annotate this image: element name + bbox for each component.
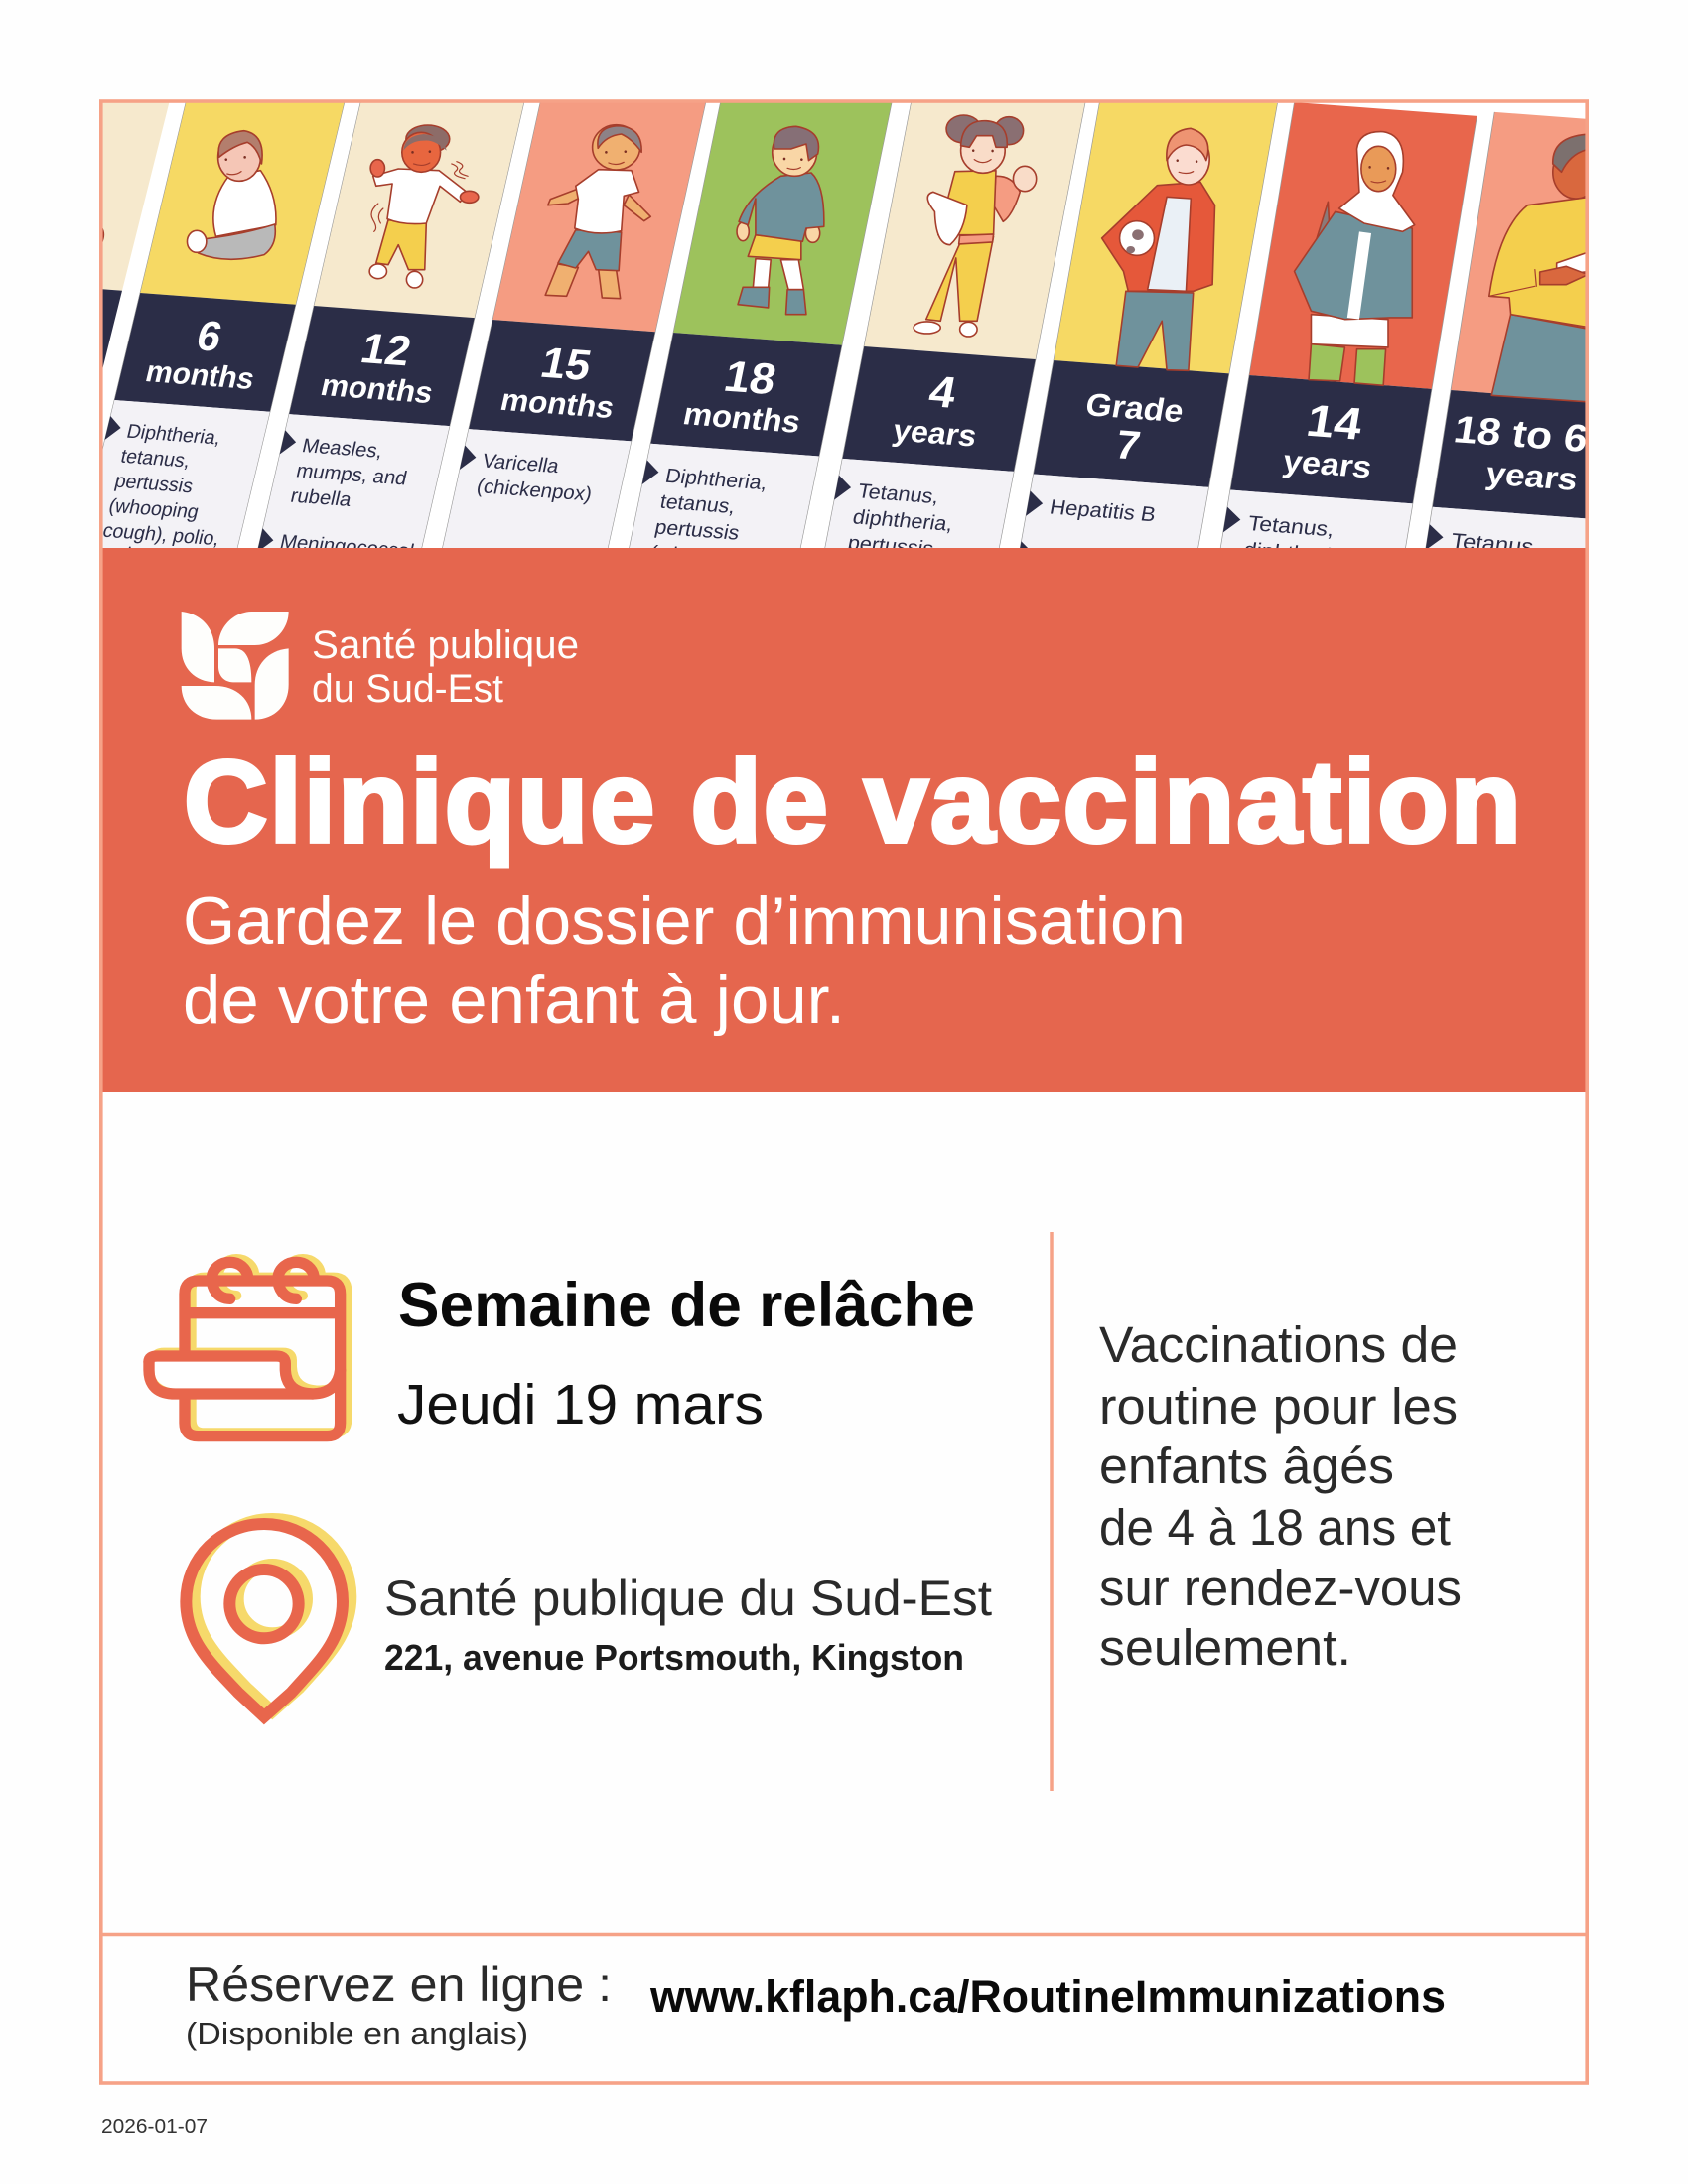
column: 4 years — [824, 103, 1086, 548]
column: previous age (cropped) — [103, 103, 169, 367]
subtitle: de votre enfant à jour. — [183, 962, 845, 1037]
text: available in English: (Disponible en anglais) — [186, 2016, 528, 2051]
figure: 15 month child — [545, 125, 650, 299]
figure: 4 year child — [914, 115, 1037, 337]
logo: Santé publique du Sud-Est: Santé publique — [312, 623, 579, 667]
column: 15 months: months — [497, 382, 618, 425]
text: routine vaccination note: seulement. — [1099, 1619, 1351, 1676]
subtitle — [183, 884, 1186, 1037]
column: Grade 7 — [1020, 103, 1278, 548]
figure: 12 month child — [369, 125, 479, 288]
figure: adult — [1488, 133, 1585, 403]
text: date stamp: 2026-01-07 — [101, 2116, 208, 2138]
column: 14 years: Tetanus, — [1246, 511, 1336, 541]
column: 4 years: Tetanus, — [856, 480, 940, 508]
column: 6 months: tetanus, — [118, 446, 193, 473]
column: 12 months: 12 — [356, 326, 415, 375]
text: venue: Santé publique du Sud-Est — [384, 1570, 992, 1626]
column: 18 months: pertussis — [653, 516, 742, 545]
column: 12 months: Meningococcal — [278, 531, 416, 563]
figures: second half of the strip — [914, 115, 1599, 402]
text: date: Jeudi 19 mars — [397, 1373, 764, 1436]
column: 15 months: Varicella — [481, 451, 561, 478]
text: routine vaccination note: Vaccinations de — [1099, 1316, 1458, 1373]
column: 6 months: Diphtheria, — [124, 421, 223, 449]
column: Grade 7: 7 — [1112, 422, 1144, 468]
column: 14 years: diphtheria — [1242, 538, 1346, 569]
column: 6 months: cough), polio, — [100, 520, 221, 550]
text: routine vaccination note: routine pour les — [1099, 1378, 1458, 1434]
column: 18 to 65 years: years — [1483, 457, 1580, 498]
column: 14 years — [1219, 103, 1477, 548]
panel: orange title band — [102, 548, 1586, 1092]
column: Grade 7: Grade — [1083, 387, 1187, 430]
column: 6 months — [103, 103, 345, 548]
column: 18 to 65 years — [1426, 111, 1585, 548]
subtitle: Gardez le dossier d’immunisation — [183, 884, 1186, 959]
column: 15 months — [442, 103, 706, 548]
figure: 6 month baby — [187, 131, 276, 259]
column: 15 months: 15 — [536, 339, 596, 390]
column: 18 months: 18 — [720, 351, 780, 404]
divider — [1050, 1232, 1054, 1791]
footer: booking — [101, 1934, 1587, 2051]
text: routine vaccination note: sur rendez-vous — [1099, 1560, 1462, 1616]
figure: grade 7 youth — [1102, 128, 1215, 370]
column: 6 months: 6 — [192, 313, 226, 361]
column: 14 years: years — [1281, 443, 1374, 484]
column: 18 to 65 years: 18 to 65 — [1451, 407, 1615, 462]
column: 12 months: rubella — [289, 485, 354, 511]
column: 18 months: months — [680, 396, 803, 440]
column: 12 months — [258, 103, 524, 548]
icon: location pin — [186, 1519, 351, 1716]
column: 12 months: Measles, — [300, 435, 385, 463]
figure: cropped arm — [103, 228, 105, 242]
column: 12 months: months — [318, 367, 436, 410]
column: 6 months: and — [95, 542, 133, 566]
column: 12 months: mumps, and — [294, 461, 409, 489]
text: website: www.kflaph.ca/RoutineImmunizations — [649, 1972, 1446, 2022]
figure: 14 year youth — [1295, 132, 1415, 385]
column: 4 years: 4 — [925, 366, 961, 418]
column: 18 months: tetanus, — [658, 490, 737, 518]
text: book online: Réservez en ligne : — [186, 1957, 612, 2012]
icon: calendar — [149, 1259, 347, 1436]
column: 18 to 65 years: Tetanus — [1450, 529, 1535, 559]
column: 15 months: (chickenpox) — [475, 476, 594, 505]
column: 4 years: pertussis — [846, 532, 935, 561]
column: 6 months: (whooping — [106, 495, 201, 523]
column: 4 years: years — [890, 413, 979, 453]
illustration: vaccination schedule strip — [103, 103, 1585, 548]
logo: Santé publique du Sud-Est: du Sud-Est — [312, 667, 503, 711]
text: address: 221, avenue Portsmouth, Kingston — [384, 1637, 964, 1678]
column: 4 years: diphtheria, — [851, 506, 955, 536]
column: 18 months — [629, 103, 892, 548]
column: 18 months: (whooping — [647, 542, 749, 571]
text: routine vaccination note: enfants âgés — [1099, 1437, 1394, 1494]
logo: Santé publique du Sud-Est — [182, 612, 579, 720]
column: Grade 7: Hepatitis B — [1048, 495, 1158, 526]
frame — [101, 101, 1587, 2083]
text: routine vaccination note: de 4 à 18 ans et — [1099, 1499, 1451, 1556]
title: Clinique de vaccination — [184, 737, 1521, 867]
figure: 18 month child — [737, 126, 824, 315]
figures: first half of the strip — [94, 125, 824, 315]
column: 18 months: Diphtheria, — [663, 465, 770, 494]
column: 6 months: months — [142, 354, 258, 396]
column: 6 months: pertussis — [112, 471, 196, 497]
text: routine vaccination note — [1099, 1316, 1462, 1676]
column: 14 years: 14 — [1303, 396, 1366, 450]
heading: Semaine de relâche: Semaine de relâche — [398, 1271, 975, 1340]
